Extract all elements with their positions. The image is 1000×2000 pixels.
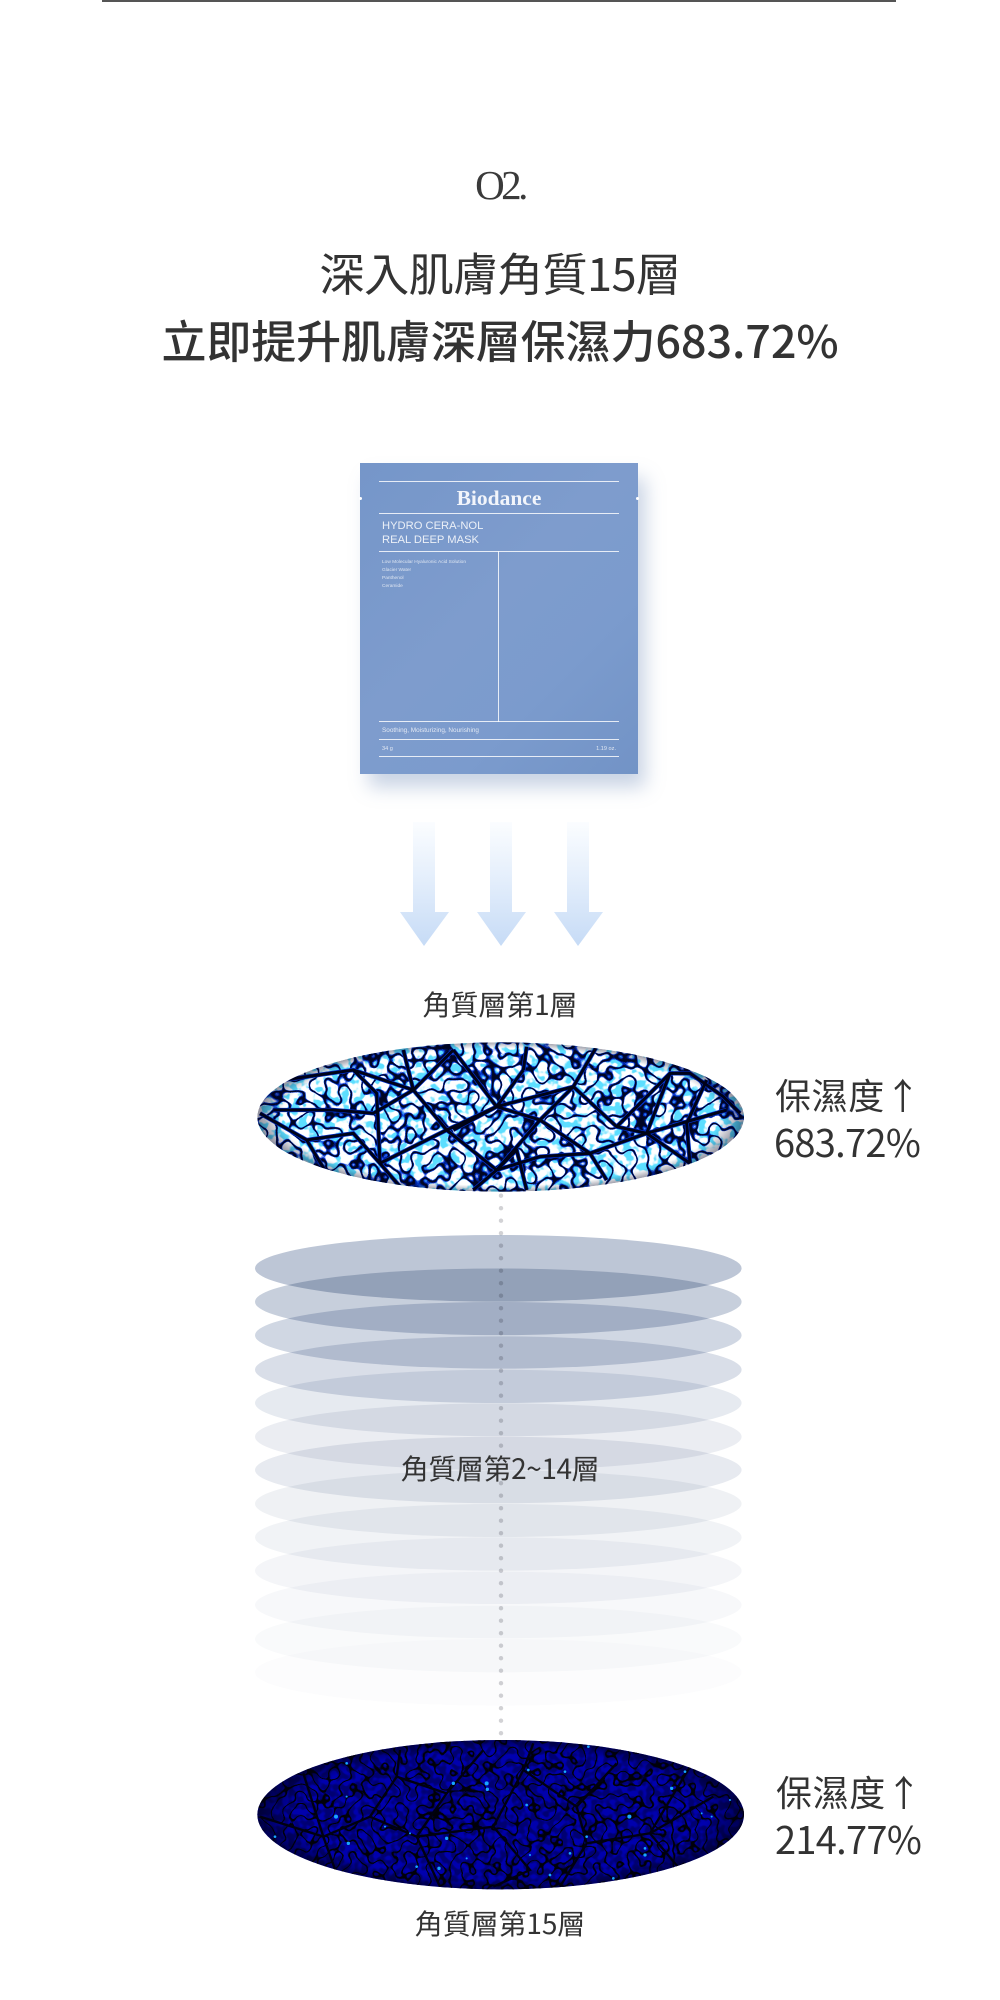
- callout heading: 保濕度↑: [776, 1765, 922, 1817]
- sachet tear notch right: [636, 497, 639, 500]
- callout heading: 保濕度↑: [775, 1068, 921, 1120]
- arrow 1: [400, 822, 449, 946]
- sachet rule: [379, 551, 619, 552]
- arrows: [400, 832, 603, 946]
- arrow 2: [477, 822, 526, 946]
- callout: layer 1 moisture: [774, 1068, 921, 1168]
- sachet ounces: 1.19 oz.: [596, 746, 616, 752]
- title line 2: 立即提升肌膚深層保濕力683.72%: [161, 306, 839, 371]
- sachet rule: [379, 721, 619, 722]
- product: mask sachet: [360, 463, 638, 774]
- section number: O2.: [475, 162, 525, 208]
- sachet ingredients: Panthenol: [382, 576, 404, 580]
- sachet product name: HYDRO CERA-NOL: [382, 520, 483, 532]
- sachet ingredients: Low Molecular Hyaluronic Acid Solution: [382, 560, 466, 564]
- sachet product name: [382, 520, 483, 546]
- layer 1 texture ellipse: [257, 1042, 744, 1192]
- sachet weight: 34 g: [382, 746, 393, 752]
- sachet ingredients: [382, 560, 466, 588]
- stacked layers 2 to 14: [255, 1235, 742, 1672]
- sachet tear notch left: [359, 497, 362, 500]
- top rule: [102, 0, 896, 2]
- sachet top rule: [379, 481, 619, 482]
- title line 1: 深入肌膚角質15層: [319, 240, 681, 305]
- sachet product name: REAL DEEP MASK: [382, 534, 479, 546]
- title: [161, 240, 839, 371]
- sachet benefits: Soothing, Moisturizing, Nourishing: [382, 727, 479, 734]
- sachet ingredients: Glacier Water: [382, 568, 411, 572]
- callout value: 683.72%: [774, 1113, 920, 1168]
- sachet brand: Biodance: [457, 486, 541, 510]
- layer 15 texture ellipse: [257, 1740, 744, 1890]
- callout value: 214.77%: [775, 1810, 921, 1865]
- sachet rule: [379, 756, 619, 757]
- arrow 3: [554, 822, 603, 946]
- dotted connector: [498, 1194, 504, 1736]
- sachet divider: [498, 551, 499, 722]
- sachet rule: [379, 513, 619, 514]
- label: layer 1: 角質層第1層: [423, 984, 577, 1024]
- sachet rule: [379, 739, 619, 740]
- label: layer 15: 角質層第15層: [415, 1903, 585, 1943]
- sachet ingredients: Ceramide: [382, 584, 403, 588]
- label: layers 2 to 14: 角質層第2~14層: [401, 1448, 599, 1488]
- callout: layer 15 moisture: [775, 1765, 922, 1865]
